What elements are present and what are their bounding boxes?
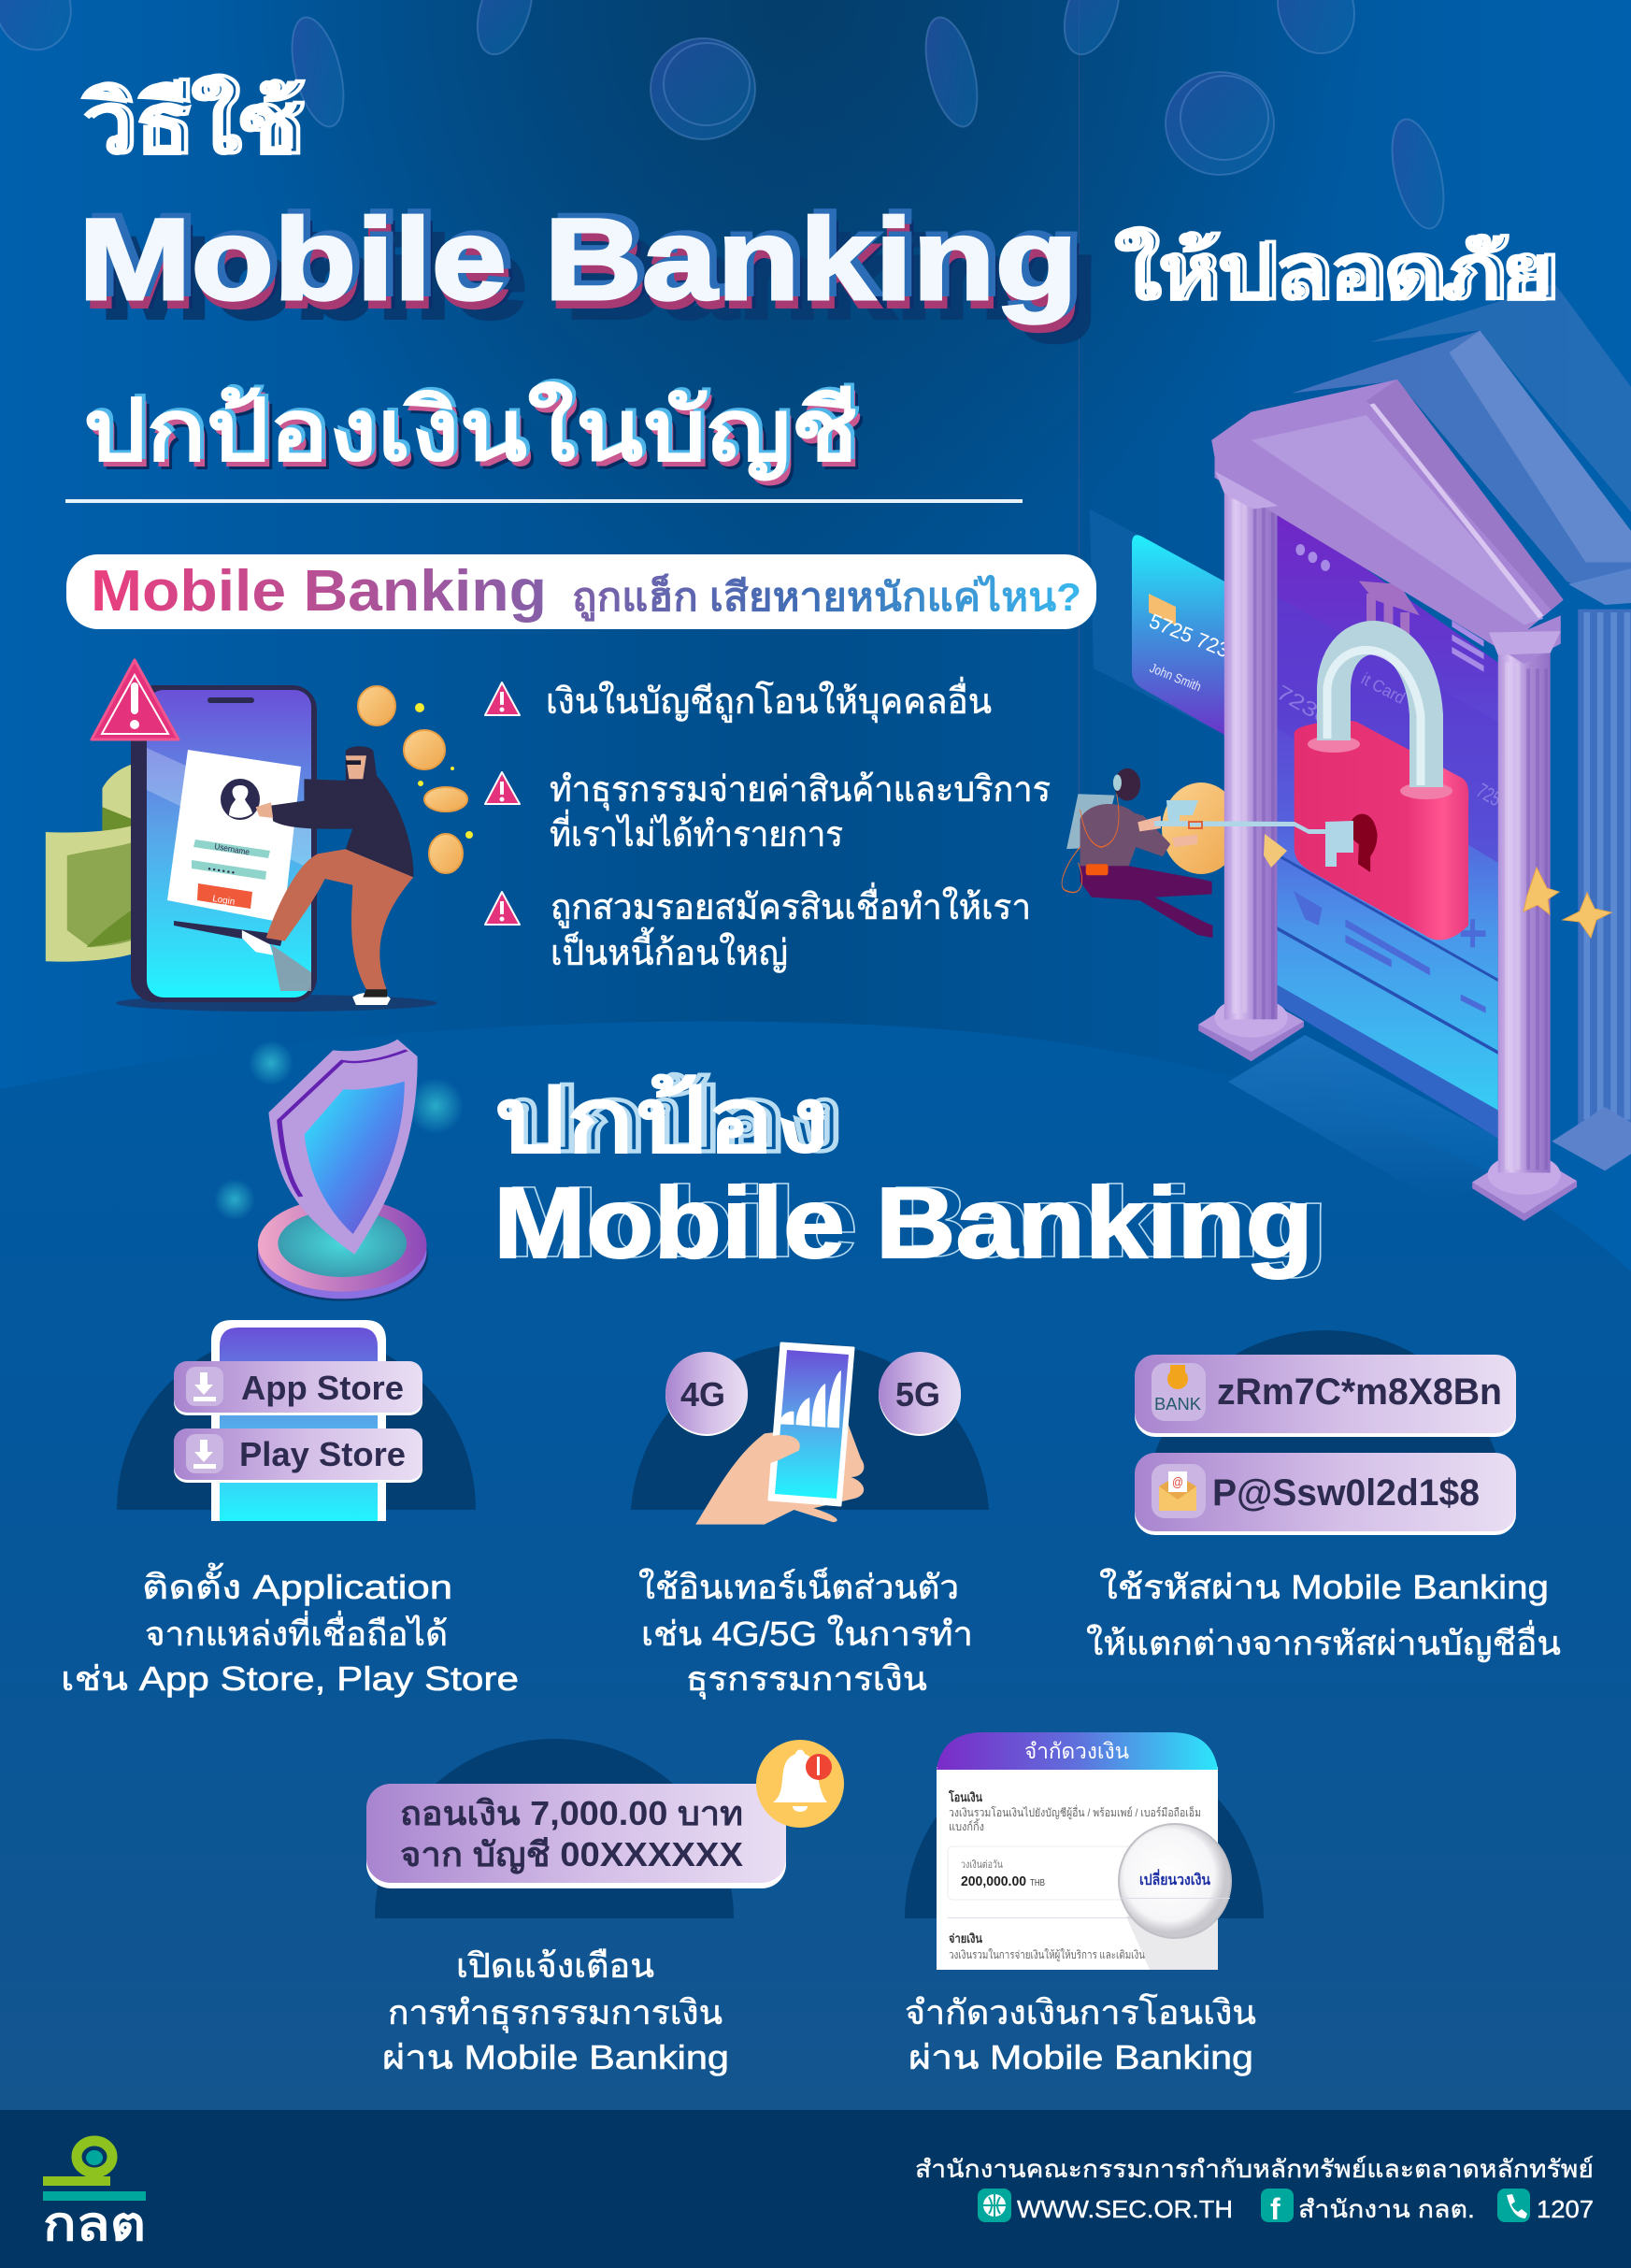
impact list [485,677,1051,973]
hand holding phone [695,1343,864,1525]
panel: use private internet [631,1343,989,1700]
title line: วิธีใช้: วิธีใช้ [85,74,307,171]
illustration: bank with padlock [1062,283,1631,1221]
illustration: thief on phone [46,660,473,1012]
magnifier lens: เปลี่ยนวงเงิน [1139,1869,1210,1888]
phone [131,685,317,1002]
App Store pill [174,1361,422,1415]
app limit screen: แบงก์กิ้ง [949,1818,984,1833]
back bank silhouettes [1292,283,1631,1170]
heading line: Mobile Banking: Mobile Banking [506,1165,1328,1278]
app limit screen: วงเงินต่อวัน [961,1859,1003,1871]
login card: •••••• [207,864,237,878]
money bill [46,764,183,962]
caption [61,1562,519,1698]
website: WWW.SEC.OR.TH [1017,2195,1233,2223]
app limit screen: จ่ายเงิน [949,1931,982,1945]
caption [638,1566,973,1700]
stars [1524,868,1611,938]
title line: วิธีใช้: วิธีใช้ [80,75,298,172]
caption: ใช้อินเทอร์เน็ตส่วนตัว [638,1566,959,1606]
notification card [366,1784,786,1888]
floor light [1228,1035,1499,1201]
password pill: email [1135,1453,1516,1535]
facebook: สำนักงาน กลต. [1298,2195,1475,2223]
question banner: Mobile Banking [91,559,547,624]
title divider [65,499,1023,503]
caption: เปิดแจ้งเตือน [456,1946,654,1985]
dome backdrop [375,1739,734,1918]
title line: Mobile Banking: Mobile Banking [87,203,1086,332]
caption: ผ่าน Mobile Banking [382,2038,729,2076]
impact 3 [485,883,1031,973]
padlock [1295,638,1468,940]
notification card: ถอนเงิน 7,000.00 บาท [400,1794,743,1832]
app limit screen: THB [1030,1878,1045,1888]
app limit screen [937,1732,1218,1970]
impact 2 [485,770,1051,854]
faint screen text [1273,669,1506,811]
title line: ปกป้องเงินในบัญชี: ปกป้องเงินในบัญชี [87,379,862,479]
heading line: ปกป้อง: ปกป้อง [506,1068,844,1170]
login card: Login [212,894,236,908]
question banner [66,554,1096,629]
icon: bell [756,1740,844,1828]
app screen inside the bank [1278,506,1498,1139]
card light beam [1090,510,1224,735]
faint screen text: 725 [1473,779,1506,811]
impact 2: ที่เราไม่ได้ทำรายการ [550,810,843,854]
dome backdrop [905,1739,1264,1918]
caption: ให้แตกต่างจากรหัสผ่านบัญชีอื่น [1086,1620,1561,1662]
app limit screen: 200,000.00 [961,1873,1026,1889]
caption: เช่น 4G/5G ในการทำ [641,1615,973,1653]
caption: ผ่าน Mobile Banking [908,2038,1253,2076]
ground shadow [116,995,437,1012]
dome backdrop [117,1330,476,1510]
impact 2: ทำธุรกรรมจ่ายค่าสินค้าและบริการ [550,770,1051,811]
icon: shield on ring [214,1040,464,1301]
title line: ปกป้องเงินในบัญชี: ปกป้องเงินในบัญชี [88,386,863,486]
faint screen text: 7230 [1273,681,1335,729]
App Store pill: App Store [241,1369,404,1407]
alert triangle [92,660,179,739]
caption: ธุรกรรมการเงิน [686,1659,927,1700]
password pill: email: P@Ssw0l2d1$8 [1212,1472,1480,1514]
caption: จำกัดวงเงินการโอนเงิน [905,1993,1256,2031]
title line: ให้ปลอดภัย: ให้ปลอดภัย [1113,227,1552,316]
4G badge: 4G [680,1375,725,1414]
title line: Mobile Banking: Mobile Banking [83,203,1082,332]
sparkles [415,703,473,839]
website [978,2189,1233,2223]
panel: unique passwords [1086,1330,1561,1662]
phone [1497,2189,1594,2223]
logo: กลต [43,2198,146,2250]
credit card: John Smith [1148,660,1204,695]
heading line: ปกป้อง: ปกป้อง [494,1069,830,1171]
decorative background coins [0,0,1453,234]
coin behind hacker [1162,782,1240,874]
app limit screen: วงเงินรวมในการจ่ายเงินให้ผู้ให้บริการ และเติมเงิน [949,1948,1145,1962]
5G badge: 5G [895,1375,940,1414]
title line: Mobile Banking: Mobile Banking [85,191,1084,320]
panel: limit transfer amount [905,1732,1264,2076]
dome backdrop [631,1343,989,1510]
login card: Username [214,841,250,857]
password pill: bank: zRm7C*m8X8Bn [1217,1371,1502,1413]
app limit screen: โอนเงิน [948,1789,982,1804]
facebook: f [1270,2192,1280,2226]
4G badge [665,1352,748,1436]
password pill: bank: BANK [1154,1395,1201,1414]
credit card [1132,535,1233,735]
caption: ติดตั้ง Application [142,1562,452,1606]
title line: ปกป้องเงินในบัญชี: ปกป้องเงินในบัญชี [83,381,858,481]
caption: จากแหล่งที่เชื่อถือได้ [145,1611,448,1653]
heading line: Mobile Banking: Mobile Banking [494,1166,1313,1279]
5G badge [879,1352,961,1436]
password pill: bank [1135,1355,1516,1437]
right column [1472,653,1577,1221]
facebook [1261,2189,1475,2226]
panel: install from trusted store [61,1320,519,1698]
title line: Mobile Banking: Mobile Banking [79,195,1078,324]
pediment roof [1211,380,1564,664]
password pill: email: @ [1172,1474,1183,1489]
credit card: 5725 723 [1146,609,1233,662]
Play Store pill: Play Store [239,1435,406,1473]
phone [211,1320,386,1521]
caption [905,1993,1256,2076]
gold gem [1264,834,1287,868]
impact 1: เงินในบัญชีถูกโอนให้บุคคลอื่น [546,677,992,723]
impact 3: เป็นหนี้ก้อนใหญ่ [551,926,788,973]
logo [43,2141,146,2250]
question banner: ถูกแฮ็ก เสียหายหนักแค่ไหน? [572,573,1081,622]
impact 3: ถูกสวมรอยสมัครสินเชื่อทำให้เรา [551,883,1031,928]
title line: ปกป้องเงินในบัญชี: ปกป้องเงินในบัญชี [91,389,866,489]
panel: transaction alerts [366,1739,844,2076]
caption: เช่น App Store, Play Store [61,1659,519,1698]
Play Store pill [174,1428,422,1483]
notification card: จาก บัญชี 00XXXXXX [400,1835,743,1874]
flying coins [358,686,467,873]
organisation name: สำนักงานคณะกรรมการกำกับหลักทรัพย์และตลาดหลักทรัพย์ [915,2155,1594,2183]
left column [1198,494,1304,1061]
title line: Mobile Banking: Mobile Banking [99,214,1098,343]
section heading [494,1068,1328,1279]
caption: การทำธุรกรรมการเงิน [388,1993,723,2033]
caption: ใช้รหัสผ่าน Mobile Banking [1099,1568,1549,1606]
lock pick tool [1154,800,1353,867]
title line: ให้ปลอดภัย: ให้ปลอดภัย [1118,226,1561,315]
faint screen text: it Card [1358,669,1409,708]
app limit screen: วงเงินรวมโอนเงินไปยังบัญชีผู้อื่น / พร้อมเพย์ / เบอร์มือถือเอ็ม [949,1804,1201,1820]
thief [242,746,413,1005]
app limit screen: จำกัดวงเงิน [1024,1739,1129,1763]
caption [382,1946,729,2076]
hacker figure [1062,768,1212,938]
phone: 1207 [1537,2195,1594,2223]
caption [1086,1568,1561,1662]
login card [167,750,301,946]
magnifier lens [1119,1824,1231,1970]
footer [0,2110,1631,2268]
title [79,74,1561,489]
dome backdrop [1146,1330,1505,1510]
